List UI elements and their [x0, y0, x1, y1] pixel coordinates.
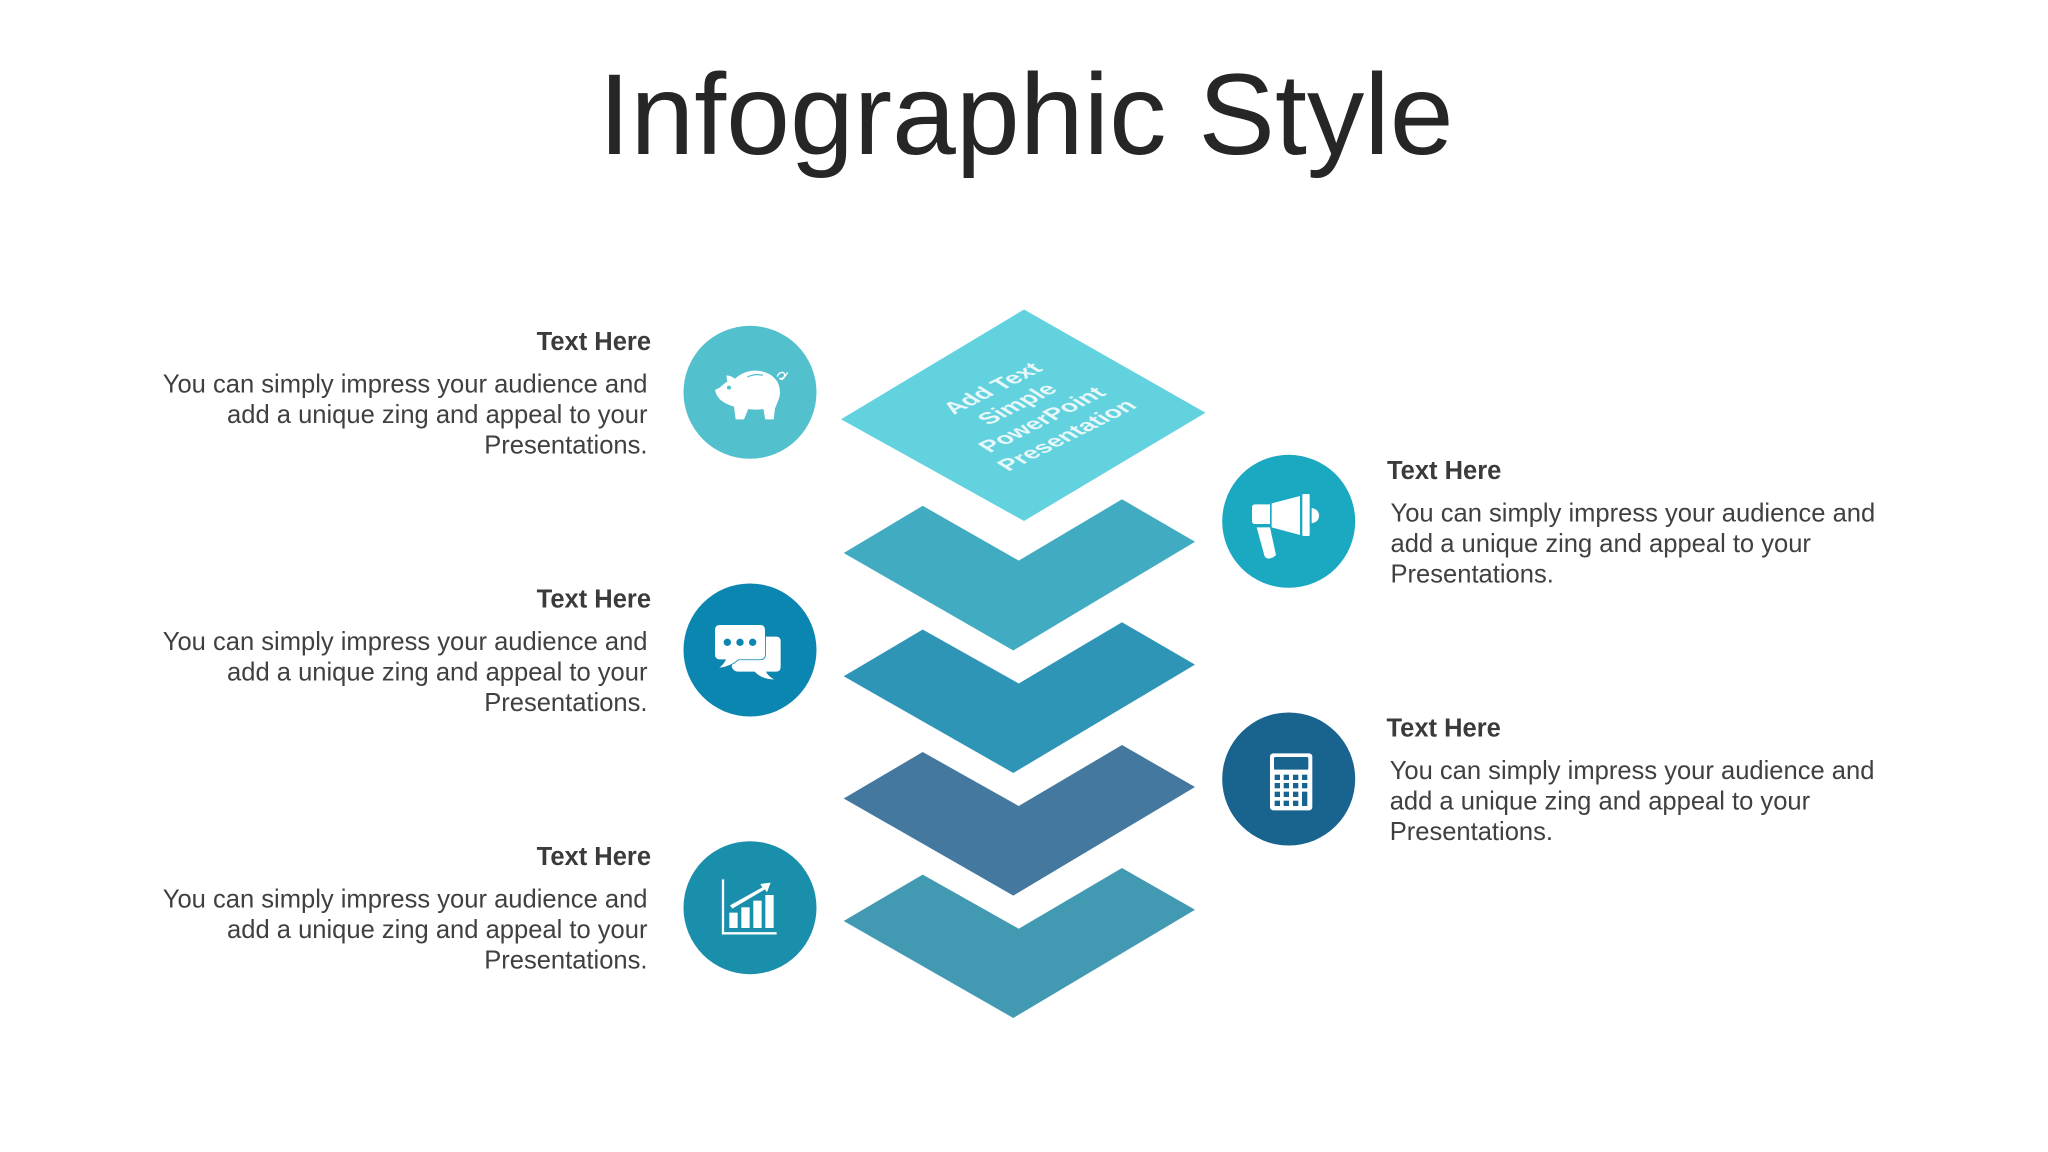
text block: left 3: Text Here [537, 843, 651, 871]
text block: right 1 [1387, 457, 1875, 588]
text block: right 1: Presentations. [1390, 560, 1554, 588]
text block: left 2: Text Here [537, 586, 651, 614]
text block: left 1: Presentations. [484, 432, 648, 460]
layered stack diagram [841, 310, 1206, 1018]
text block: left 2: Presentations. [484, 689, 648, 717]
callout: chart circle [684, 841, 816, 974]
text block: right 2: Presentations. [1390, 818, 1553, 846]
title: Infographic Style [598, 51, 1454, 179]
callout: chat circle [684, 584, 816, 716]
text block: right 1: Text Here [1387, 457, 1501, 485]
diamond label: Add Text [937, 359, 1048, 417]
diamond label: Presentation [991, 396, 1142, 474]
text block: left 2: add a unique zing and appeal to your [227, 658, 648, 686]
callout: piggy bank circle [684, 326, 816, 459]
callout: calculator circle [1222, 712, 1355, 846]
chevron layer 4 [844, 868, 1195, 1018]
icon: megaphone [1252, 494, 1319, 559]
text block: right 2: Text Here [1386, 714, 1501, 742]
top diamond with text [841, 310, 1206, 521]
icon: speech bubbles [715, 625, 781, 679]
chevron layer 2 [844, 622, 1195, 773]
chevron layer 3 [844, 745, 1195, 896]
text block: left 1: You can simply impress your audience and [163, 370, 648, 398]
text block: right 1: You can simply impress your audience and [1390, 500, 1875, 528]
text block: right 2 [1386, 714, 1874, 846]
icon: calculator [1270, 753, 1312, 810]
text block: left 3 [163, 843, 651, 974]
diamond label: PowerPoint [972, 383, 1112, 456]
text block: left 3: You can simply impress your audience and [163, 886, 648, 914]
diamond label [917, 349, 1142, 474]
chevron layer 1 [844, 499, 1195, 650]
text block: left 2: You can simply impress your audience and [163, 628, 648, 656]
icon: growth bar chart [723, 879, 777, 933]
text block: left 2 [163, 586, 651, 717]
text block: left 1 [163, 328, 651, 460]
text block: left 3: Presentations. [484, 946, 648, 974]
text block: left 3: add a unique zing and appeal to your [227, 916, 648, 944]
icon: piggy bank [715, 371, 788, 419]
text block: right 1: add a unique zing and appeal to your [1390, 530, 1811, 558]
callout: megaphone circle [1222, 455, 1355, 588]
text block: left 1: add a unique zing and appeal to your [227, 401, 648, 429]
text block: right 2: You can simply impress your audience and [1390, 757, 1874, 785]
text block: left 1: Text Here [537, 328, 651, 356]
diamond label: Simple [971, 379, 1063, 428]
text block: right 2: add a unique zing and appeal to your [1390, 788, 1811, 816]
